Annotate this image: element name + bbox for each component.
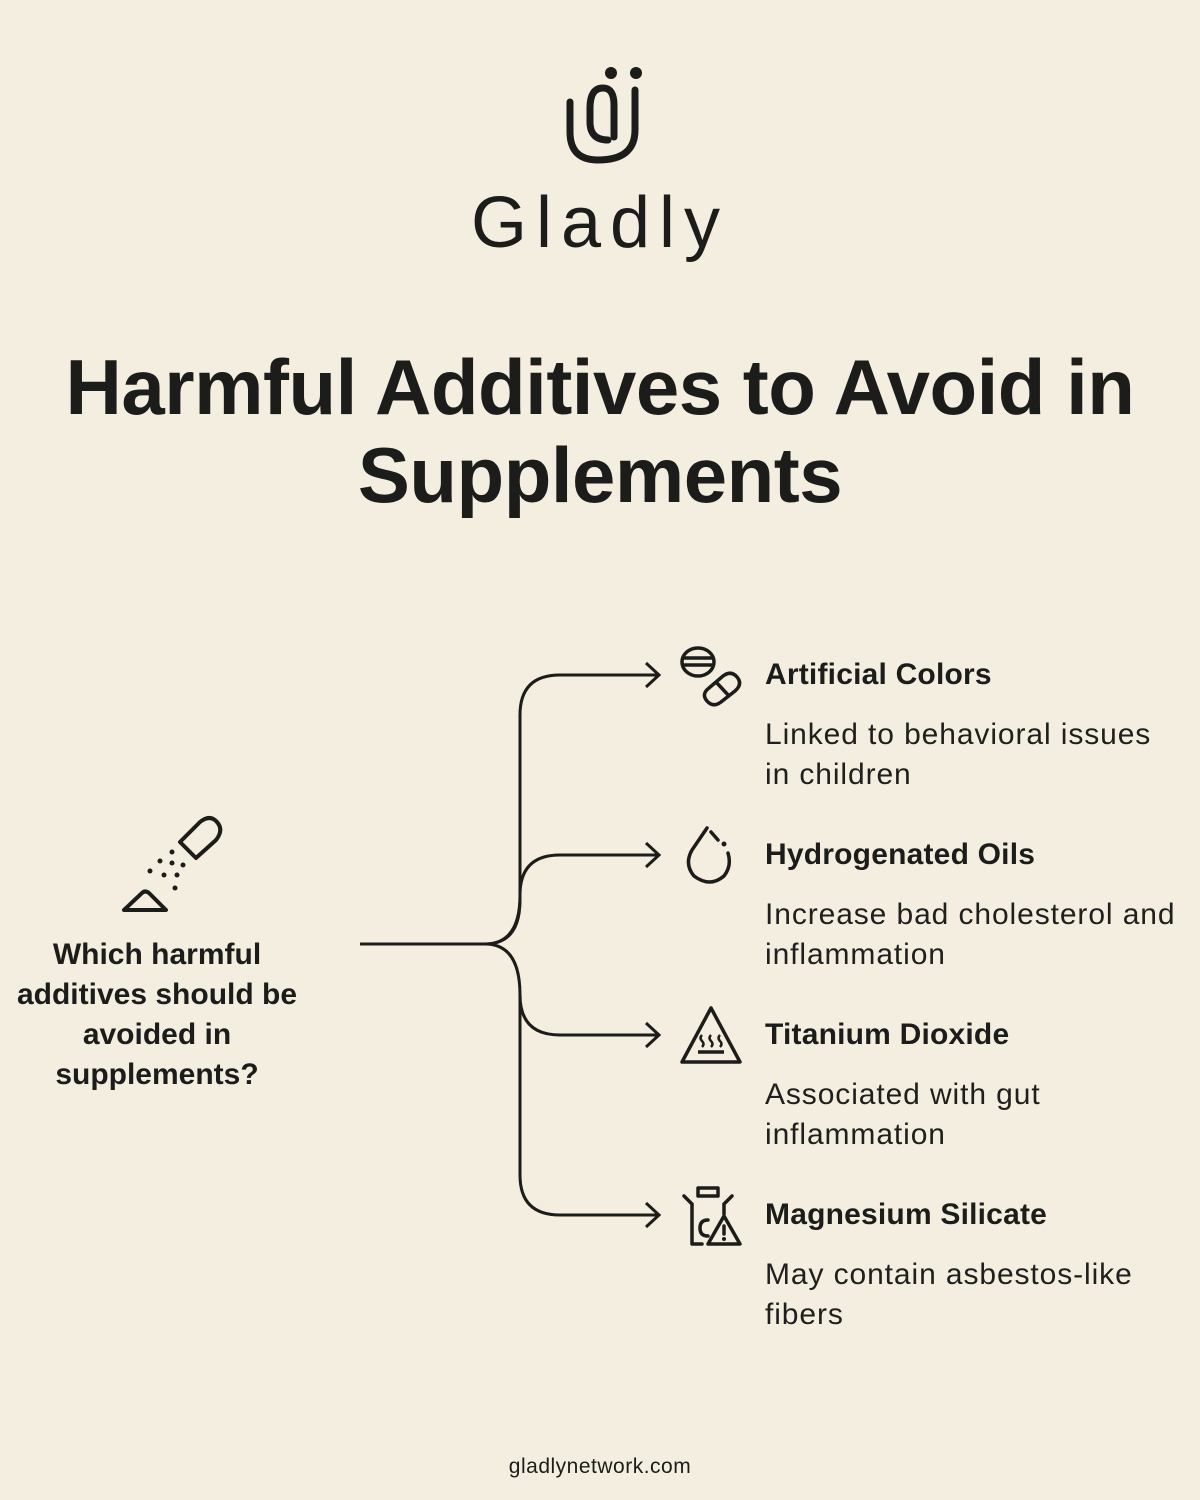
item: Hydrogenated Oils: Hydrogenated Oils <box>765 838 1035 871</box>
item: Titanium Dioxide: inflammation <box>765 1118 946 1151</box>
item: Magnesium Silicate: Magnesium Silicate <box>765 1198 1047 1231</box>
title: Supplements <box>358 431 842 519</box>
item: Magnesium Silicate: May contain asbestos-like <box>765 1258 1133 1291</box>
question text: Which harmful additives should be avoided in supplements? <box>17 938 297 1091</box>
item: Hydrogenated Oils: inflammation <box>765 938 946 971</box>
item: Titanium Dioxide <box>765 1018 1041 1151</box>
item: Magnesium Silicate: fibers <box>765 1298 844 1331</box>
item: Titanium Dioxide: Titanium Dioxide <box>765 1018 1009 1051</box>
item: Artificial Colors: in children <box>765 758 912 791</box>
item: Hydrogenated Oils <box>765 838 1175 971</box>
icon: jar with warning <box>682 1186 742 1246</box>
brand name: Gladly <box>471 183 729 263</box>
icon: drop <box>686 826 732 884</box>
item: Artificial Colors <box>765 658 1151 791</box>
item: Magnesium Silicate <box>765 1198 1133 1331</box>
icon: heat warning <box>680 1006 742 1064</box>
icon: pills <box>680 646 742 707</box>
item: Artificial Colors: Artificial Colors <box>765 658 992 691</box>
item: Hydrogenated Oils: Increase bad cholesterol and <box>765 898 1175 931</box>
icon: capsule powder <box>122 816 222 912</box>
item: Artificial Colors: Linked to behavioral issues <box>765 718 1151 751</box>
title <box>66 343 1134 519</box>
footer url: gladlynetwork.com <box>509 1455 691 1478</box>
logo icon <box>566 67 642 164</box>
item: Titanium Dioxide: Associated with gut <box>765 1078 1041 1111</box>
title: Harmful Additives to Avoid in <box>66 343 1134 431</box>
